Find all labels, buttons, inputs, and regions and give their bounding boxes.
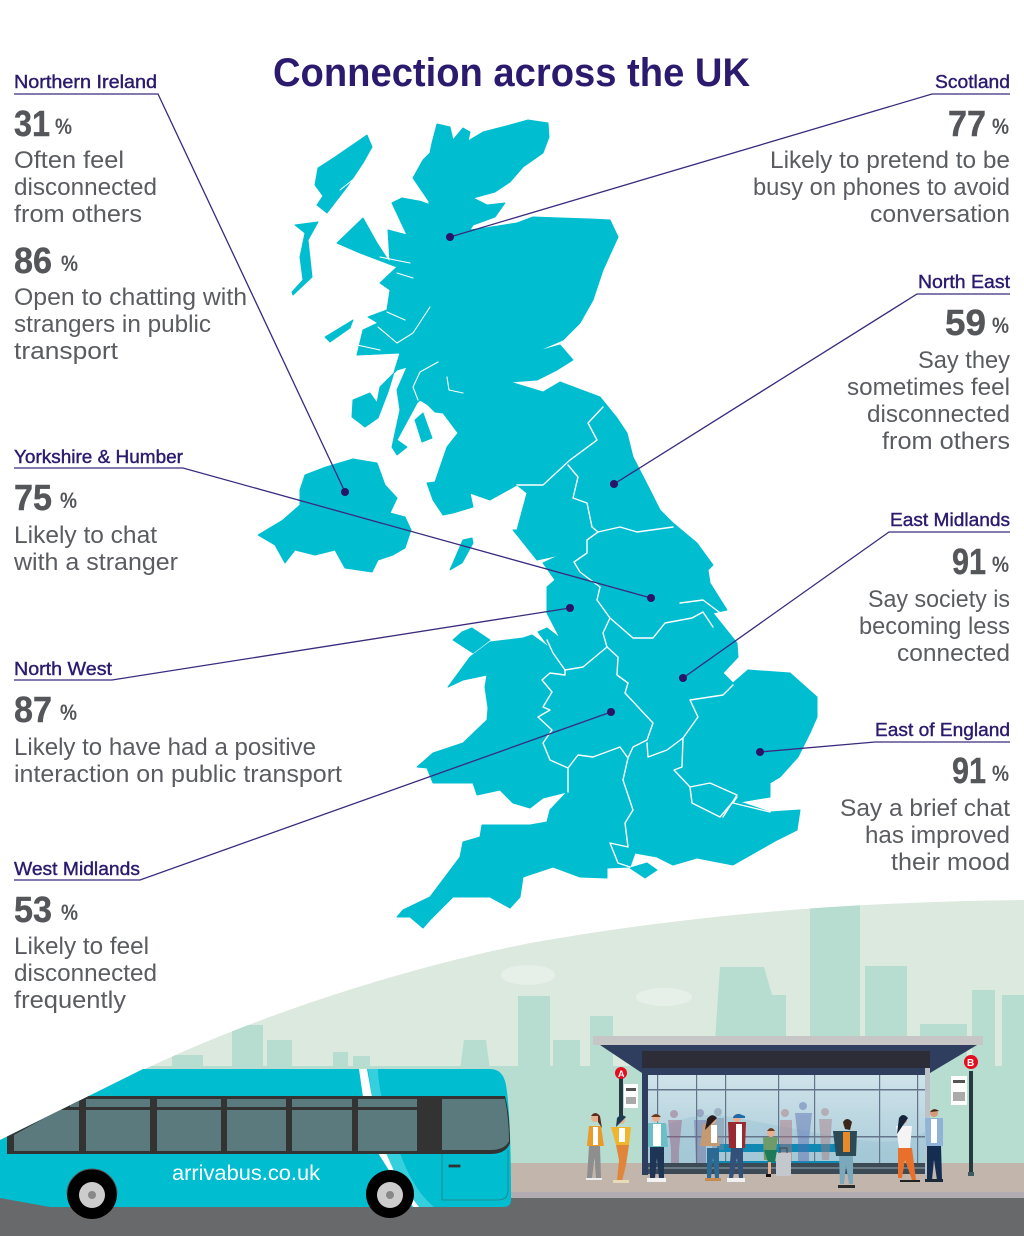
stat: 87%: %: [60, 700, 77, 725]
bus door: [442, 1150, 508, 1200]
bus name: arrivabus.co.uk: [172, 1162, 321, 1185]
map: Isle of Wight: [630, 863, 657, 878]
leader line: North West: [14, 604, 574, 680]
person 3: [647, 1114, 668, 1182]
text: society less connected: becoming less: [859, 613, 1010, 640]
heading: North East: North East: [918, 272, 1010, 292]
bus shelter: [593, 1036, 983, 1175]
text: often feel disconnected: from others: [14, 201, 142, 228]
bus window band: [7, 1096, 510, 1154]
map: Arran: [415, 413, 432, 442]
stat: 86%: 86: [14, 240, 52, 281]
heading: Northern Ireland: Northern Ireland: [14, 72, 157, 92]
person 8: [896, 1115, 920, 1182]
panel: East of England: [756, 720, 1010, 876]
leader line: North East: [610, 294, 1010, 488]
panel: Scotland: [446, 72, 1010, 241]
stat: 75%: [14, 477, 77, 518]
background passengers behind glass: [668, 1102, 832, 1163]
stat: 75%: %: [60, 488, 77, 513]
text: pretend to be busy: conversation: [870, 201, 1010, 228]
person 7: [833, 1119, 857, 1188]
text: brief chat improved mood: Say a brief chat: [840, 795, 1010, 822]
wheel: rear: [67, 1169, 117, 1219]
text: likely to feel disconnected: [14, 933, 157, 1014]
stat: 86%: %: [61, 251, 78, 276]
stat: 53%: %: [61, 900, 78, 925]
text: brief chat improved mood: [840, 795, 1010, 876]
map: sea lochs: [340, 178, 463, 400]
heading: Yorkshire and Humber: Yorkshire & Humber: [14, 447, 183, 467]
panel: North East: [610, 272, 1010, 488]
heading: West Midlands: West Midlands: [14, 859, 140, 879]
stat: 87%: [14, 689, 77, 730]
leader line: Scotland: [446, 94, 1010, 241]
person 1: [586, 1113, 604, 1180]
map: Uist: [292, 222, 318, 295]
bus livery stripes: [359, 1069, 434, 1207]
leader line: West Midlands: [14, 708, 615, 880]
text: pretend to be busy: [753, 147, 1010, 228]
panel: West Midlands: [14, 708, 615, 1014]
person 5: [727, 1114, 746, 1182]
text: open to chatting: Open to chatting with: [14, 284, 247, 311]
map: Great Britain mainland: [337, 120, 817, 928]
leader line: Northern Ireland: [14, 94, 349, 496]
text: likely to feel disconnected: frequently: [14, 987, 126, 1014]
stat: 31%: %: [55, 114, 72, 139]
text: sometimes feel disconnected: disconnected: [867, 401, 1010, 428]
text: brief chat improved mood: has improved: [865, 822, 1010, 849]
stat: 75%: 75: [14, 477, 52, 518]
text: society less connected: connected: [897, 640, 1010, 667]
stat: 91%: %: [992, 552, 1009, 577]
stat: 59%: 59: [945, 302, 986, 343]
heading: East of England: East of England: [875, 720, 1010, 740]
stat: 77%: 77: [948, 103, 986, 144]
person 2: [611, 1115, 631, 1183]
text: sometimes feel disconnected: [847, 347, 1010, 455]
stat: 59%: %: [992, 313, 1009, 338]
text: likely to feel disconnected: Likely to feel: [14, 933, 149, 960]
panel: Northern Ireland: [14, 72, 349, 496]
bus: [0, 1069, 511, 1219]
map: Anglesey: [453, 628, 490, 653]
text: open to chatting: strangers in public: [14, 311, 211, 338]
text: brief chat improved mood: their mood: [891, 849, 1010, 876]
text: sometimes feel disconnected: sometimes feel: [847, 374, 1010, 401]
text: sometimes feel disconnected: from others: [882, 428, 1010, 455]
text: positive interaction: interaction on public transport: [14, 761, 342, 788]
people waiting: [586, 1109, 943, 1188]
stat: 91%: 91: [952, 750, 986, 791]
shelter glass: [647, 1075, 925, 1163]
panel: East Midlands: [679, 510, 1010, 682]
title: Connection across the UK: [273, 51, 750, 95]
ground: pavement, kerb and road: [0, 1163, 1024, 1236]
wheel: front: [366, 1170, 414, 1218]
stat: 77%: [948, 103, 1009, 144]
person 4: [700, 1115, 721, 1181]
stat: 53%: 53: [14, 889, 52, 930]
text: positive interaction: Likely to have had a positive: [14, 734, 316, 761]
suitcase: [776, 1148, 791, 1176]
map: Tiree and Coll: [325, 320, 353, 342]
heading: East Midlands: East Midlands: [890, 510, 1010, 530]
bus body: [0, 1069, 511, 1207]
text: sometimes feel disconnected: Say they: [918, 347, 1010, 374]
map: Isle of Man: [450, 538, 473, 570]
person 9: [925, 1109, 943, 1182]
stat: 91%: %: [992, 761, 1009, 786]
text: often feel disconnected: Often feel: [14, 147, 124, 174]
leader line: East of England: [756, 742, 1010, 756]
text: often feel disconnected: [14, 147, 157, 228]
text: open to chatting: transport: [14, 338, 118, 365]
text: likely to chat: with a stranger: [13, 549, 178, 576]
shelter bench: [710, 1144, 840, 1163]
person 6 seated: [763, 1128, 778, 1177]
stat: 31%: [14, 103, 72, 144]
leader line: East Midlands: [679, 532, 1010, 682]
stat: 31%: 31: [14, 103, 50, 144]
stat: 86%: [14, 240, 78, 281]
shelter roof: [593, 1036, 983, 1075]
bus stop sign B: [951, 1055, 978, 1176]
leader line: Yorkshire and Humber: [14, 468, 655, 602]
stat: 77%: %: [992, 114, 1009, 139]
background scene: hill and skyline: [0, 900, 1024, 1163]
text: likely to feel disconnected: disconnected: [14, 960, 157, 987]
text: likely to chat: [13, 522, 178, 576]
text: pretend to be busy: Likely to pretend to be: [770, 147, 1010, 174]
panel: North West: [14, 604, 574, 788]
stat: 91%: 91: [952, 541, 986, 582]
stat: 59%: [945, 302, 1009, 343]
shelter base and posts: [642, 1068, 930, 1175]
text: positive interaction: [14, 734, 342, 788]
map: Northern Ireland: [258, 459, 411, 572]
text: pretend to be busy: busy on phones to avoid: [753, 174, 1010, 201]
heading: North West: North West: [14, 659, 112, 679]
panel: Yorkshire and Humber: [13, 447, 655, 602]
bus stop sign B: B: [967, 1058, 974, 1069]
text: society less connected: [859, 586, 1010, 667]
text: often feel disconnected: disconnected: [14, 174, 157, 201]
text: society less connected: Say society is: [868, 586, 1010, 613]
map: Lewis and Harris: [315, 135, 372, 213]
UK map: [258, 120, 817, 928]
bus stop sign A: A: [618, 1069, 625, 1079]
text: open to chatting: [14, 284, 247, 365]
bus windows: [14, 1099, 509, 1151]
text: likely to chat: Likely to chat: [14, 522, 157, 549]
map: region boundaries: [517, 407, 770, 867]
stat: 53%: [14, 889, 78, 930]
bus stop sign A: [615, 1067, 638, 1118]
heading: Scotland: Scotland: [935, 72, 1010, 92]
stat: 87%: 87: [14, 689, 52, 730]
